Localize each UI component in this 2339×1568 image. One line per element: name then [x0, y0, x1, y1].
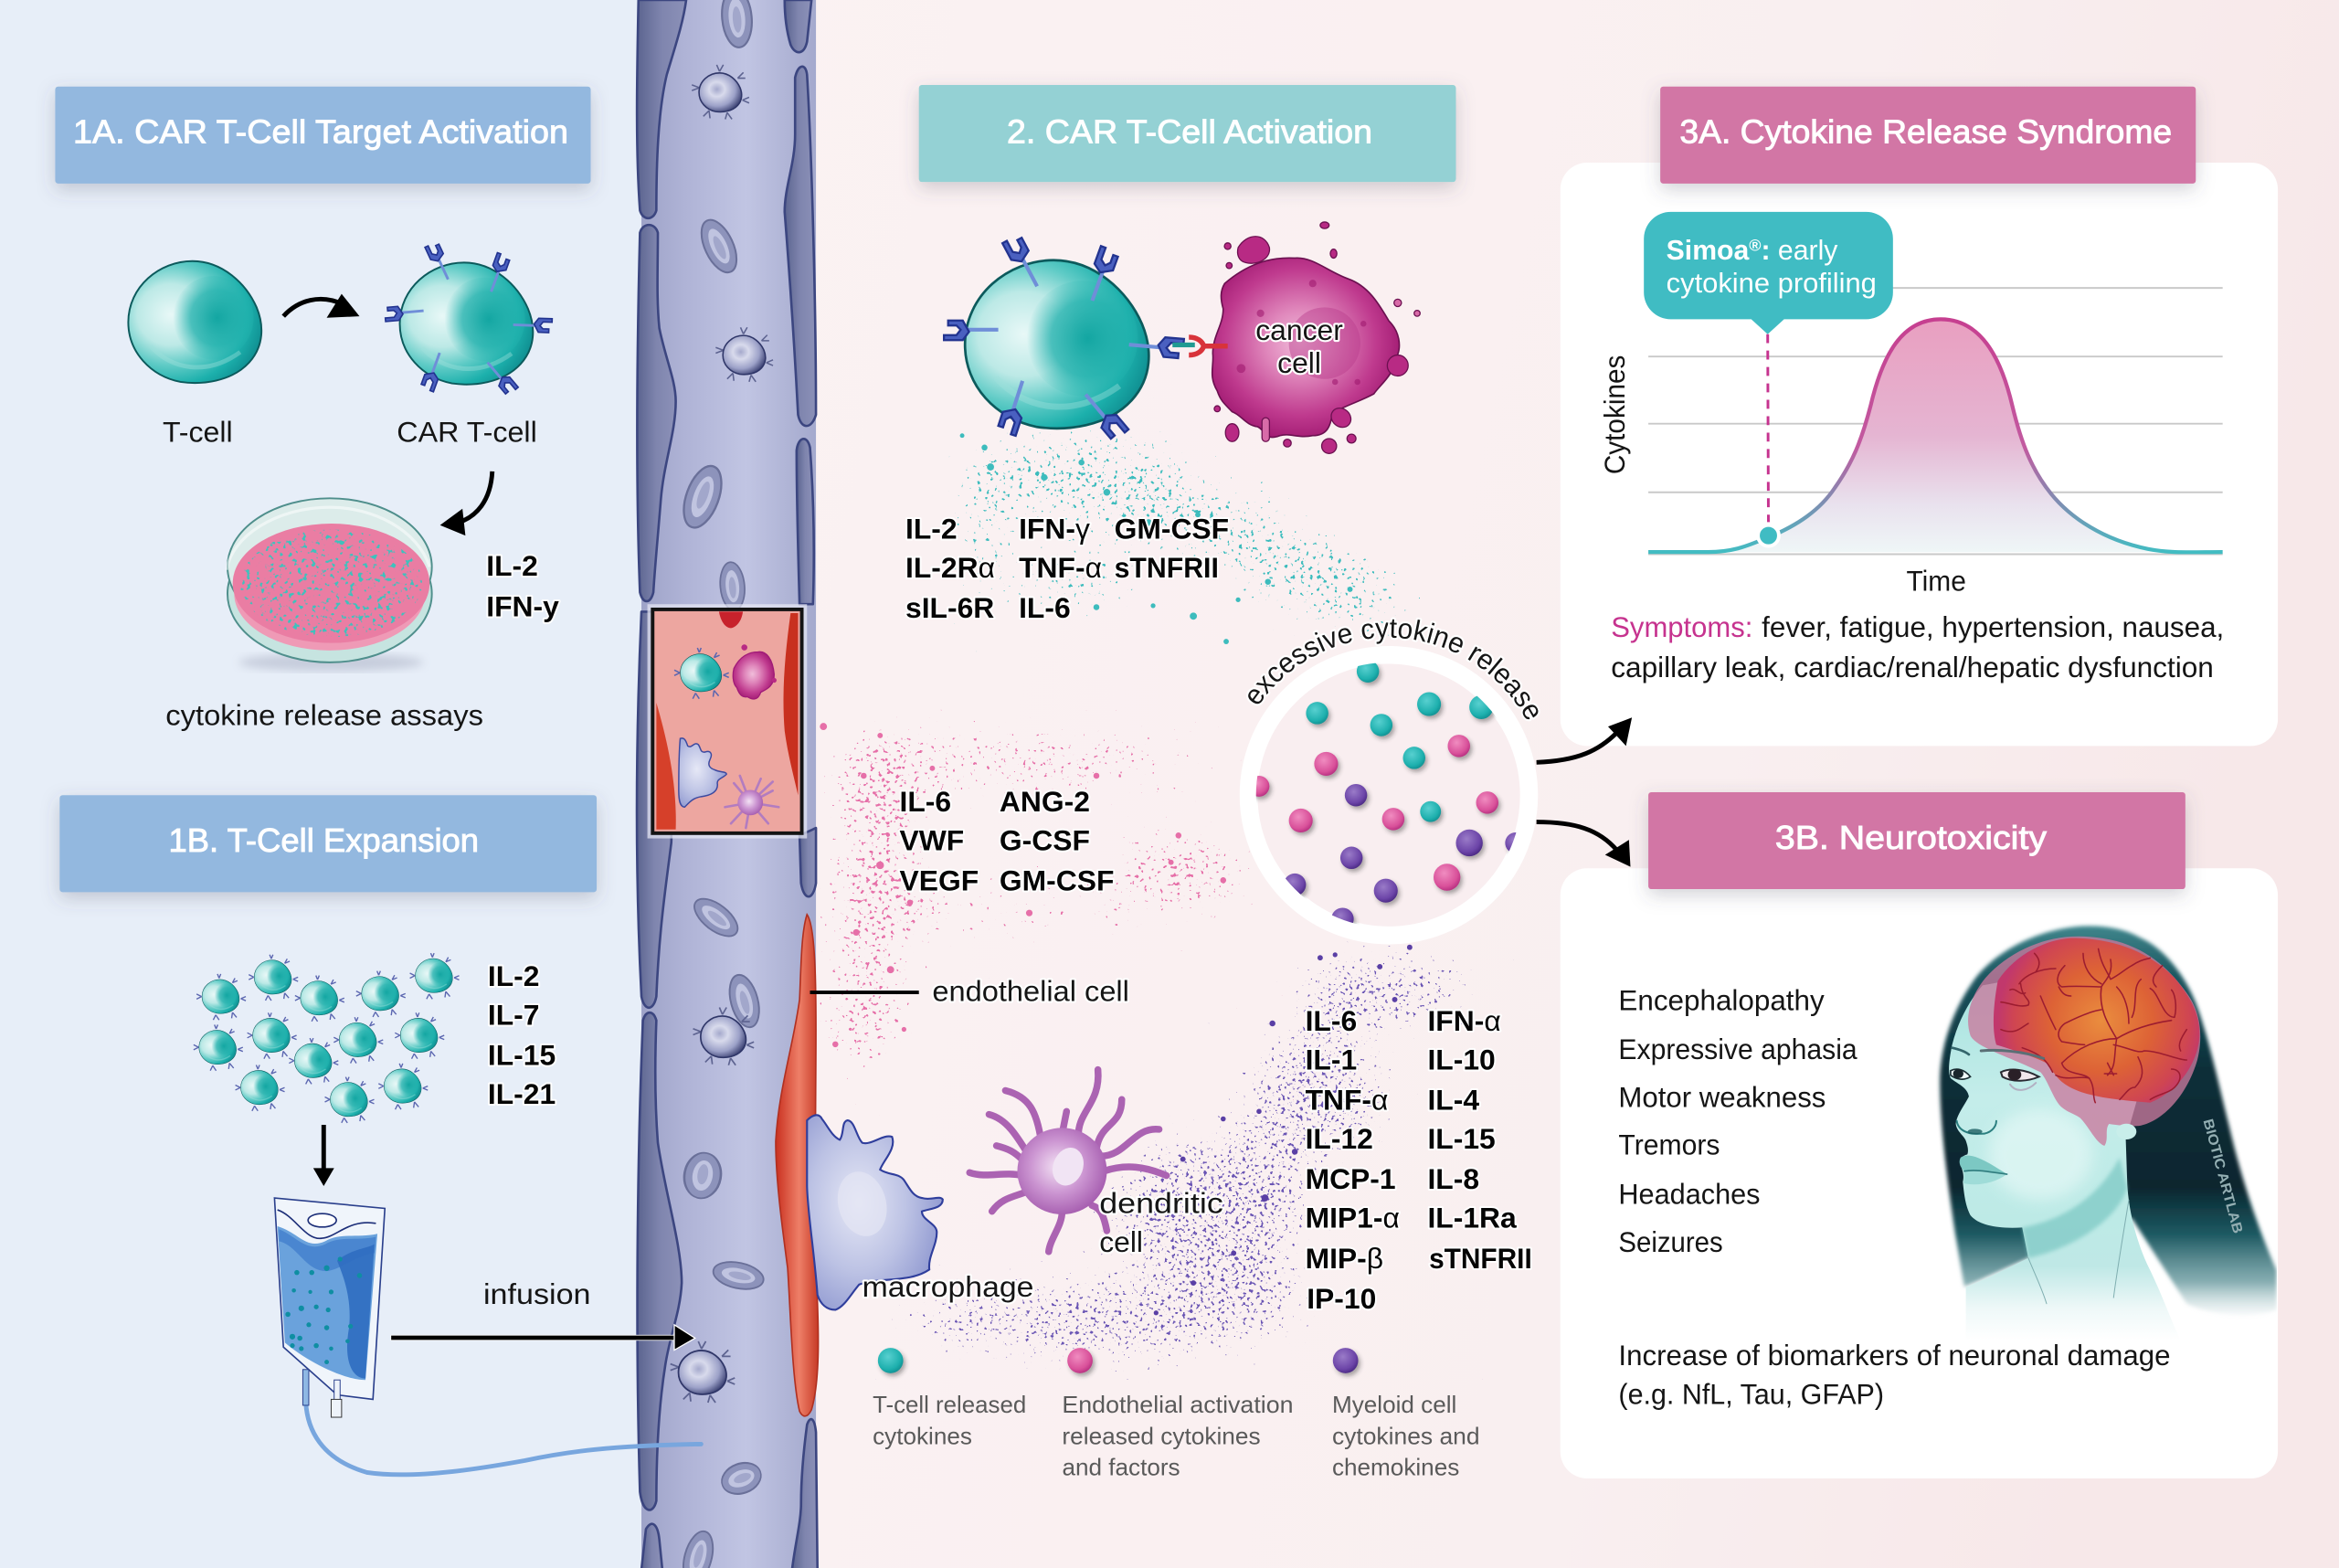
cytokine list: endothelial: [899, 785, 1114, 897]
cytokine list: myeloid: IP-10: [1307, 1282, 1376, 1315]
banner 1B: 1B. T-Cell Expansion: [168, 821, 479, 859]
cytokine list: T-cell released: sTNFRII: [1115, 551, 1219, 584]
banner 3B: [1648, 792, 2186, 889]
cytokine list: expansion: IL-15: [488, 1039, 556, 1072]
cytokine list: endothelial: VEGF: [899, 864, 979, 897]
inset dendritic cell: [725, 776, 778, 828]
cytokine list: expansion: IL-21: [488, 1077, 556, 1110]
axis: Time: Time: [1907, 565, 1966, 598]
axis: Cytokines: Cytokines: [1598, 355, 1631, 474]
legend: myeloid: Myeloid cell: [1332, 1391, 1456, 1418]
callout: Simoa: cytokine profiling: [1667, 269, 1877, 299]
cytokine list: endothelial: VWF: [899, 824, 964, 857]
label: dendritic cell: dendritic: [1099, 1186, 1223, 1219]
T-cell: [128, 261, 261, 383]
brain: [1968, 937, 2200, 1146]
background: left blue zone: [0, 0, 672, 1568]
cytokine list: T-cell released: [905, 512, 1229, 624]
cytokine list: myeloid: TNF-α: [1306, 1084, 1388, 1117]
label: CAR T-cell: CAR T-cell: [397, 415, 537, 448]
legend: endothelial: and factors: [1062, 1454, 1180, 1481]
inset cancer cell: [733, 644, 777, 699]
cytokine list: myeloid: sTNFRII: [1429, 1242, 1532, 1275]
legend: myeloid: [1332, 1348, 1480, 1481]
label: infusion: infusion: [483, 1277, 591, 1310]
red blood cells: [676, 0, 766, 1568]
label: cancer cell: cancer: [1255, 313, 1343, 346]
banner 3B: 3B. Neurotoxicity: [1775, 819, 2047, 856]
banner 2: [919, 85, 1455, 182]
cytokine list: T-cell released: GM-CSF: [1115, 512, 1229, 545]
text: symptoms: Symptoms:: [1611, 610, 1752, 643]
label line: endothelial cell: endothelial cell: [932, 975, 1129, 1008]
list: neurotoxicity symptoms: Expressive aphasia: [1618, 1033, 1857, 1065]
list: neurotoxicity symptoms: Motor weakness: [1618, 1080, 1826, 1113]
head and brain illustration: [1940, 926, 2277, 1340]
panel: 3A: [1561, 163, 2278, 746]
cancer cell: [1212, 222, 1420, 453]
macrophage: [807, 1115, 943, 1309]
banner 2: 2. CAR T-Cell Activation: [1007, 113, 1372, 151]
cytokine list: expansion: IL-2: [488, 959, 539, 992]
cytokine list: T-cell released: IL-2Rα: [905, 551, 995, 584]
cytokine list: myeloid: MIP-β: [1306, 1242, 1383, 1275]
cytokine list: myeloid: IL-6: [1306, 1004, 1357, 1037]
cytokine list: myeloid: MIP1-α: [1306, 1202, 1400, 1234]
cytokine list: myeloid: IL-10: [1427, 1044, 1496, 1076]
legend: T-cell released: [873, 1348, 1026, 1449]
arrow: infusion: [391, 1325, 695, 1351]
circulating CAR T-cells: [671, 65, 773, 1403]
legend: myeloid: cytokines and: [1332, 1422, 1480, 1449]
large cytokine dots: [820, 433, 1413, 1315]
cytokine list: expansion: [488, 959, 556, 1110]
cytokine list: myeloid: IL-15: [1427, 1122, 1496, 1155]
callout: Simoa: early: [1778, 236, 1837, 266]
cytokine list: T-cell released: IFN-γ: [1019, 512, 1090, 545]
list: neurotoxicity symptoms: Headaches: [1618, 1178, 1761, 1211]
label: excessive cytokine release: excessive cytokine release: [1246, 618, 1540, 722]
arrow: to neurotoxicity: [1537, 822, 1630, 867]
IV bag: [274, 1198, 701, 1475]
callout: Simoa: :: [1761, 236, 1771, 266]
panel: 3B: [1561, 868, 2278, 1478]
CAR-antigen binding: [1172, 337, 1228, 355]
legend: endothelial: released cytokines: [1062, 1422, 1261, 1449]
label: cancer cell: [1255, 313, 1343, 379]
CRS chart: [1598, 288, 2223, 598]
cytokine list: myeloid: MCP-1: [1306, 1162, 1396, 1195]
arrow: CAR T-cell to assay: [440, 471, 492, 535]
cytokine list: myeloid: IFN-α: [1427, 1004, 1501, 1037]
callout: Simoa: [1644, 212, 1893, 334]
cytokine list: expansion: IL-7: [488, 999, 539, 1032]
background: right pink zone: [656, 0, 2339, 1568]
cytokine list: endothelial: G-CSF: [1000, 824, 1090, 857]
credit: Biotic Artlab: BIOTIC ARTLAB: [2200, 1118, 2245, 1235]
inset: vessel close-up: [648, 604, 807, 839]
CAR T-cell: [385, 241, 552, 397]
arrow: T-cell to CAR T-cell: [283, 294, 359, 318]
cytokine list: T-cell released: TNF-α: [1019, 551, 1102, 584]
label: cancer cell: cell: [1277, 346, 1321, 379]
text: IL-2: IL-2: [486, 549, 538, 582]
arrow: to CRS: [1537, 717, 1632, 762]
cytokine list: myeloid: IL-1Ra: [1427, 1202, 1517, 1234]
list: neurotoxicity symptoms: Seizures: [1618, 1225, 1723, 1258]
label: dendritic cell: cell: [1099, 1225, 1143, 1258]
banner 3A: 3A. Cytokine Release Syndrome: [1679, 113, 2172, 151]
legend: endothelial: Endothelial activation: [1062, 1391, 1294, 1418]
cytokine list: myeloid: IL-4: [1427, 1084, 1479, 1117]
cytokine list: myeloid: IL-8: [1427, 1162, 1479, 1195]
cytokine list: myeloid: IL-1: [1306, 1044, 1357, 1076]
banner 1A: [55, 87, 591, 184]
list: neurotoxicity symptoms: Tremors: [1618, 1128, 1720, 1161]
inset T-cell: [674, 648, 729, 699]
ear: [2116, 1124, 2136, 1139]
legend: [873, 1348, 1480, 1481]
dendritic cell: [969, 1070, 1167, 1252]
inset macrophage: [679, 738, 726, 807]
text: IFN-y: IFN-y: [486, 589, 559, 622]
cytokine list: T-cell released: sIL-6R: [905, 591, 994, 624]
legend: T-cell released: T-cell released: [873, 1391, 1026, 1418]
callout: Simoa: Simoa: [1667, 236, 1771, 266]
banner 3A: [1660, 87, 2196, 184]
speckles: myeloid cytokines: [898, 953, 1476, 1362]
list: neurotoxicity symptoms: Encephalopathy: [1618, 983, 1825, 1016]
cytokine circle: [1249, 655, 1529, 936]
list: neurotoxicity symptoms: [1618, 983, 1857, 1258]
cytokine list: myeloid: [1306, 1004, 1532, 1315]
arrow: cluster to bag: [313, 1125, 334, 1186]
text: biomarkers: [1618, 1339, 2171, 1410]
cytokine list: endothelial: GM-CSF: [1000, 864, 1114, 897]
legend: myeloid: chemokines: [1332, 1454, 1459, 1481]
text: symptoms: fever, fatigue, hypertension, nausea,: [1762, 610, 2224, 643]
text: biomarkers: (e.g. NfL, Tau, GFAP): [1618, 1377, 1884, 1410]
expanded T-cell cluster: [194, 953, 460, 1123]
text: symptoms: capillary leak, cardiac/renal/hepatic dysfunction: [1611, 651, 2214, 683]
endothelial cell (activated): [776, 915, 819, 1416]
banner 1B: [59, 795, 597, 892]
label: macrophage: macrophage: [863, 1270, 1033, 1303]
text: symptoms: [1611, 610, 2224, 683]
label: cytokine release assays: cytokine release assays: [165, 698, 483, 731]
facial features: [1951, 1048, 2129, 1304]
banner 1A: 1A. CAR T-Cell Target Activation: [73, 113, 568, 151]
cytokine list: endothelial: ANG-2: [1000, 785, 1090, 818]
cytokine list: endothelial: IL-6: [899, 785, 951, 818]
cytokine list: T-cell released: IL-6: [1019, 591, 1071, 624]
speckles: endothelial cytokines: [826, 724, 1253, 1070]
speckles: T-cell released cytokines: [947, 432, 1429, 656]
blood vessel: [637, 0, 818, 1568]
text: biomarkers: Increase of biomarkers of neuronal damage: [1618, 1339, 2171, 1372]
cytokine list: myeloid: IL-12: [1306, 1122, 1373, 1155]
activated CAR T-cell: [944, 234, 1184, 442]
callout: Simoa: ®: [1749, 236, 1761, 254]
petri dish: [227, 498, 432, 672]
label: dendritic cell: [1099, 1186, 1223, 1258]
legend: T-cell released: cytokines: [873, 1422, 972, 1449]
label: T-cell: T-cell: [163, 415, 233, 448]
legend: endothelial: [1062, 1348, 1294, 1481]
label line: endothelial cell: [810, 975, 1129, 1008]
cytokine list: T-cell released: IL-2: [905, 512, 958, 545]
